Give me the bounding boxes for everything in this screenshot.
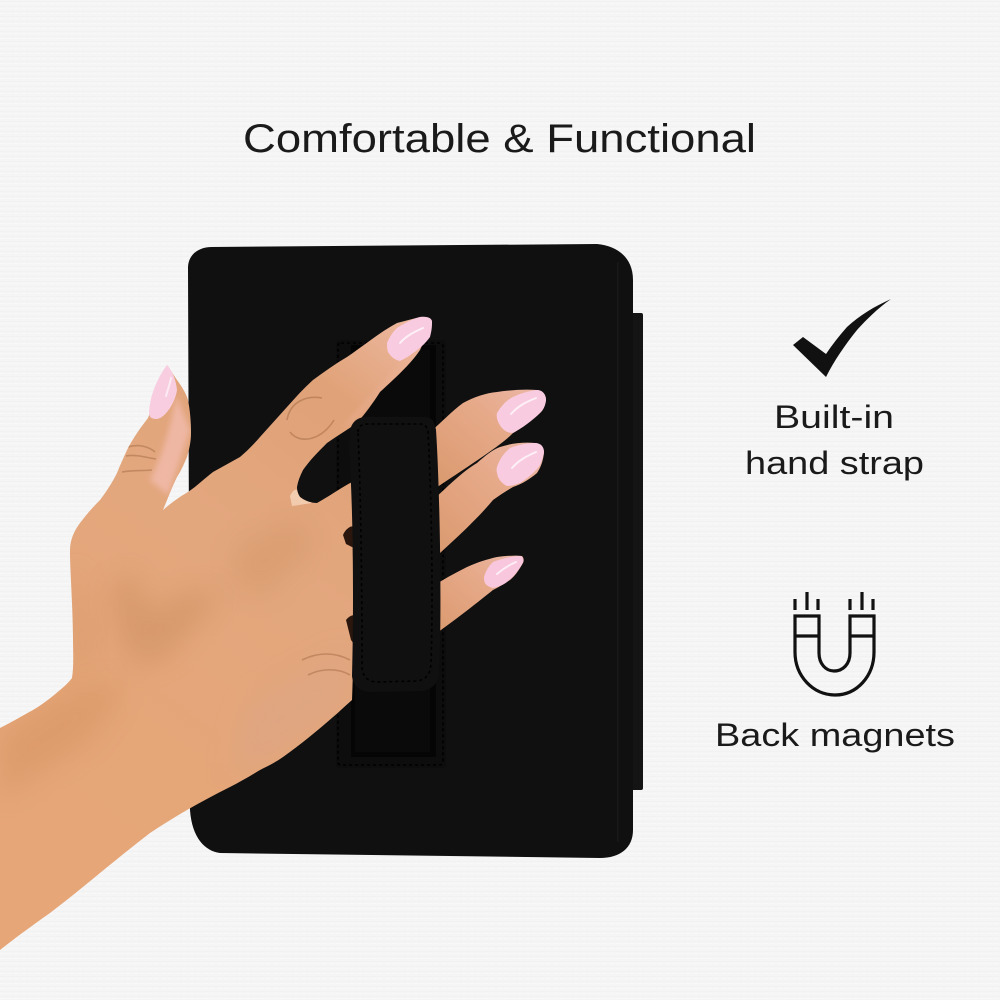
strap overlay patch bbox=[349, 417, 440, 692]
index nail bbox=[387, 317, 432, 361]
pinky nail bbox=[484, 556, 523, 588]
tablet case bbox=[188, 244, 643, 858]
middle nail bbox=[497, 390, 546, 433]
case spine bbox=[620, 313, 643, 790]
infographic canvas bbox=[0, 123, 954, 950]
hand strap bbox=[336, 340, 446, 768]
knuckle creases bbox=[122, 397, 350, 675]
stitched strap base bbox=[336, 340, 446, 768]
label: back magnets: Back magnets bbox=[715, 717, 955, 753]
label: built-in hand strap: Built-in bbox=[774, 399, 894, 435]
title: Comfortable & Functional bbox=[243, 117, 756, 161]
ring nail bbox=[497, 443, 544, 486]
hand shading bbox=[6, 347, 422, 776]
label: built-in hand strap bbox=[745, 399, 924, 481]
icon: check mark bbox=[793, 299, 891, 377]
ring finger bbox=[430, 443, 544, 562]
thumb nail bbox=[149, 365, 177, 419]
case back panel bbox=[188, 244, 633, 858]
icon: horseshoe magnet bbox=[795, 592, 874, 695]
middle finger bbox=[430, 390, 546, 492]
fingers beyond the strap bbox=[430, 390, 546, 638]
label: built-in hand strap: hand strap bbox=[745, 445, 924, 481]
hand bbox=[0, 317, 432, 950]
elastic band bbox=[351, 345, 436, 757]
pinky finger bbox=[430, 556, 524, 638]
